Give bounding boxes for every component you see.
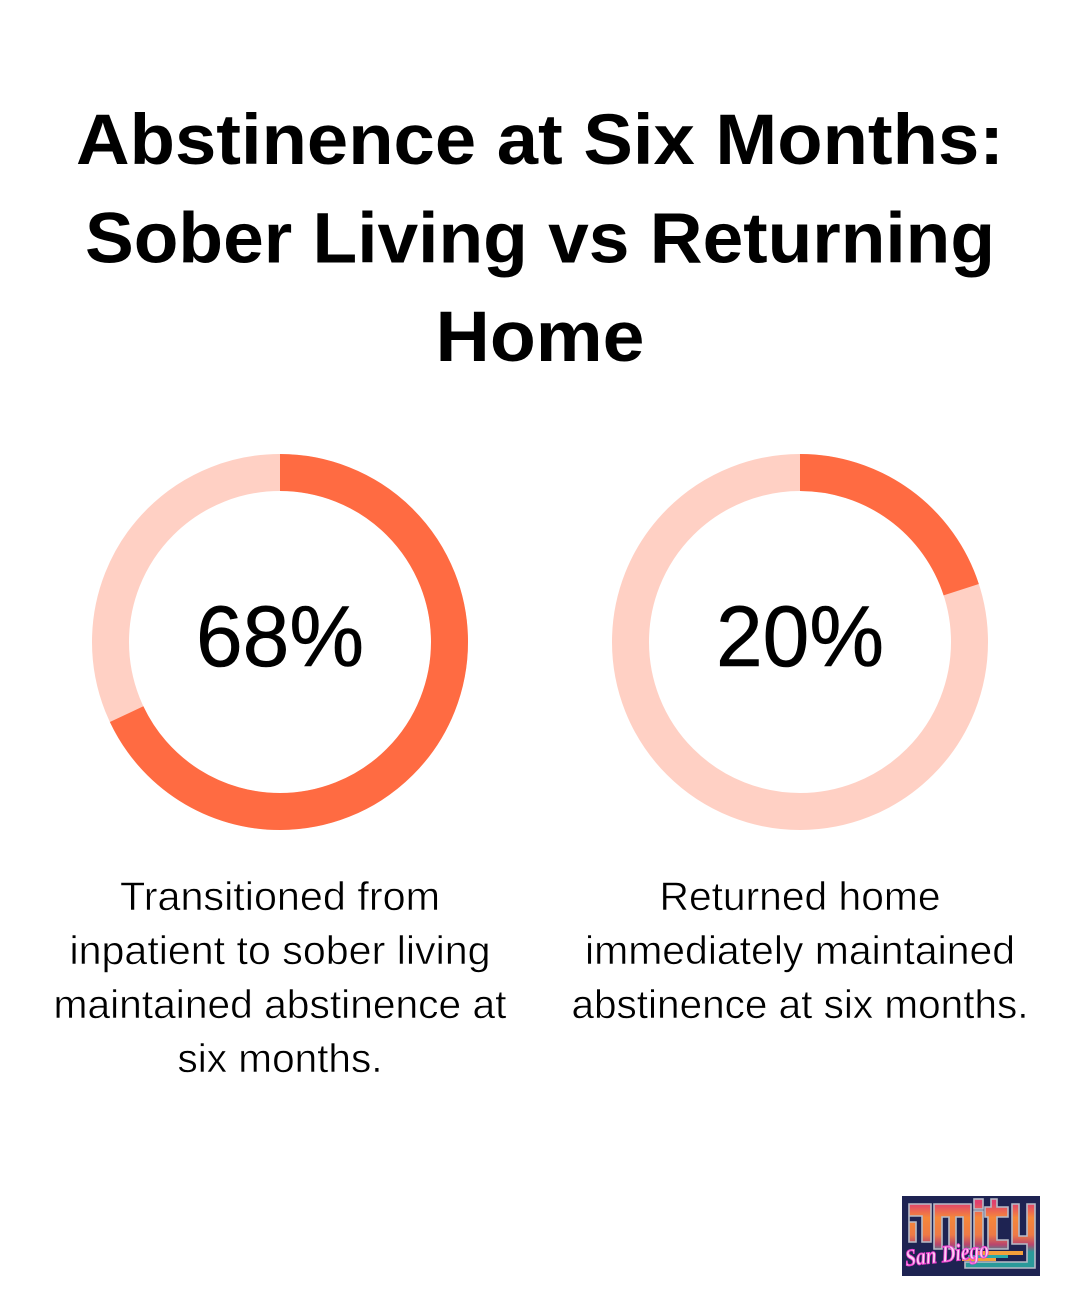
logo script text: San Diego bbox=[904, 1237, 990, 1272]
caption: sober living bbox=[54, 875, 507, 1081]
caption: returned home: Returned home bbox=[660, 875, 940, 919]
logo letters: amity bbox=[909, 1199, 1035, 1268]
caption: sober living: inpatient to sober living bbox=[70, 929, 490, 973]
panel: sober living bbox=[54, 472, 507, 1081]
caption: returned home: abstinence at six months. bbox=[572, 983, 1028, 1027]
logo beach stripes bbox=[962, 1251, 1023, 1261]
stat: 68%: 68% bbox=[196, 589, 364, 685]
caption: returned home: immediately maintained bbox=[585, 929, 1015, 973]
donut chart: 68% bbox=[110, 472, 450, 812]
logo: Amity San Diego bbox=[902, 1196, 1040, 1276]
title: Abstinence at Six Months: bbox=[76, 101, 1004, 180]
stat: 20%: 20% bbox=[716, 589, 884, 685]
caption: sober living: six months. bbox=[178, 1037, 382, 1081]
title bbox=[76, 101, 1004, 377]
title: Sober Living vs Returning bbox=[85, 200, 995, 278]
title: Home bbox=[436, 298, 644, 377]
panel: returned home bbox=[572, 472, 1028, 1027]
caption: sober living: Transitioned from bbox=[120, 875, 440, 919]
caption: sober living: maintained abstinence at bbox=[54, 983, 507, 1027]
caption: returned home bbox=[572, 875, 1028, 1027]
donut chart: 20% bbox=[630, 472, 970, 812]
